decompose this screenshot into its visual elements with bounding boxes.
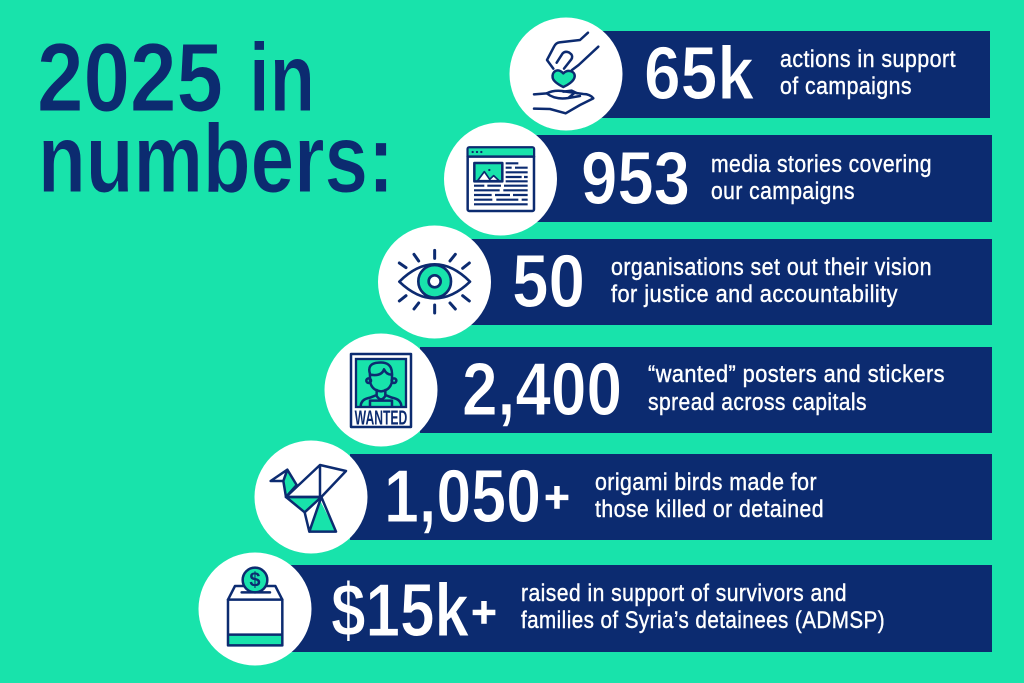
title: in — [249, 23, 315, 132]
description: our campaigns — [711, 178, 855, 205]
icon: origami bird — [254, 440, 368, 554]
title: numbers: — [38, 104, 394, 213]
description: origami birds made for — [595, 469, 817, 496]
number: + — [544, 473, 570, 522]
description: of campaigns — [780, 73, 912, 100]
row 5: origami birds — [254, 440, 992, 554]
description — [648, 361, 945, 416]
icon: hand giving heart — [510, 18, 622, 130]
description — [611, 254, 932, 308]
description: media stories covering — [711, 151, 932, 178]
description: those killed or detained — [595, 496, 824, 523]
description — [780, 46, 956, 100]
number: 1,050 — [384, 454, 541, 538]
icon: eye — [378, 226, 491, 338]
row 2: media stories — [444, 122, 992, 236]
row 3: organisations — [378, 226, 992, 338]
description: organisations set out their vision — [611, 254, 932, 281]
title: 2025 — [37, 23, 223, 132]
number: $15k — [331, 568, 469, 652]
description — [595, 469, 824, 523]
description — [521, 580, 885, 634]
description: raised in support of survivors and — [521, 580, 847, 607]
description: spread across capitals — [648, 389, 867, 416]
description — [711, 151, 932, 205]
number: 65k — [644, 31, 754, 115]
description: families of Syria’s detainees (ADMSP) — [521, 607, 885, 634]
icon: web page article — [444, 122, 557, 236]
description: “wanted” posters and stickers — [648, 361, 945, 388]
icon: donation box with coin — [198, 552, 312, 666]
number: 953 — [581, 136, 690, 220]
number: + — [471, 588, 497, 637]
row 6: funds raised — [198, 552, 992, 666]
row 1: actions in support of campaigns — [510, 18, 990, 130]
icon: wanted poster: WANTED — [355, 407, 407, 429]
icon: donation box with coin: $ — [249, 570, 261, 592]
number: 2,400 — [462, 347, 622, 431]
icon: wanted poster — [324, 334, 438, 446]
row 4: wanted posters — [324, 334, 992, 446]
title — [37, 23, 394, 213]
number: 50 — [512, 239, 585, 323]
description: for justice and accountability — [611, 281, 898, 308]
description: actions in support — [780, 46, 956, 73]
